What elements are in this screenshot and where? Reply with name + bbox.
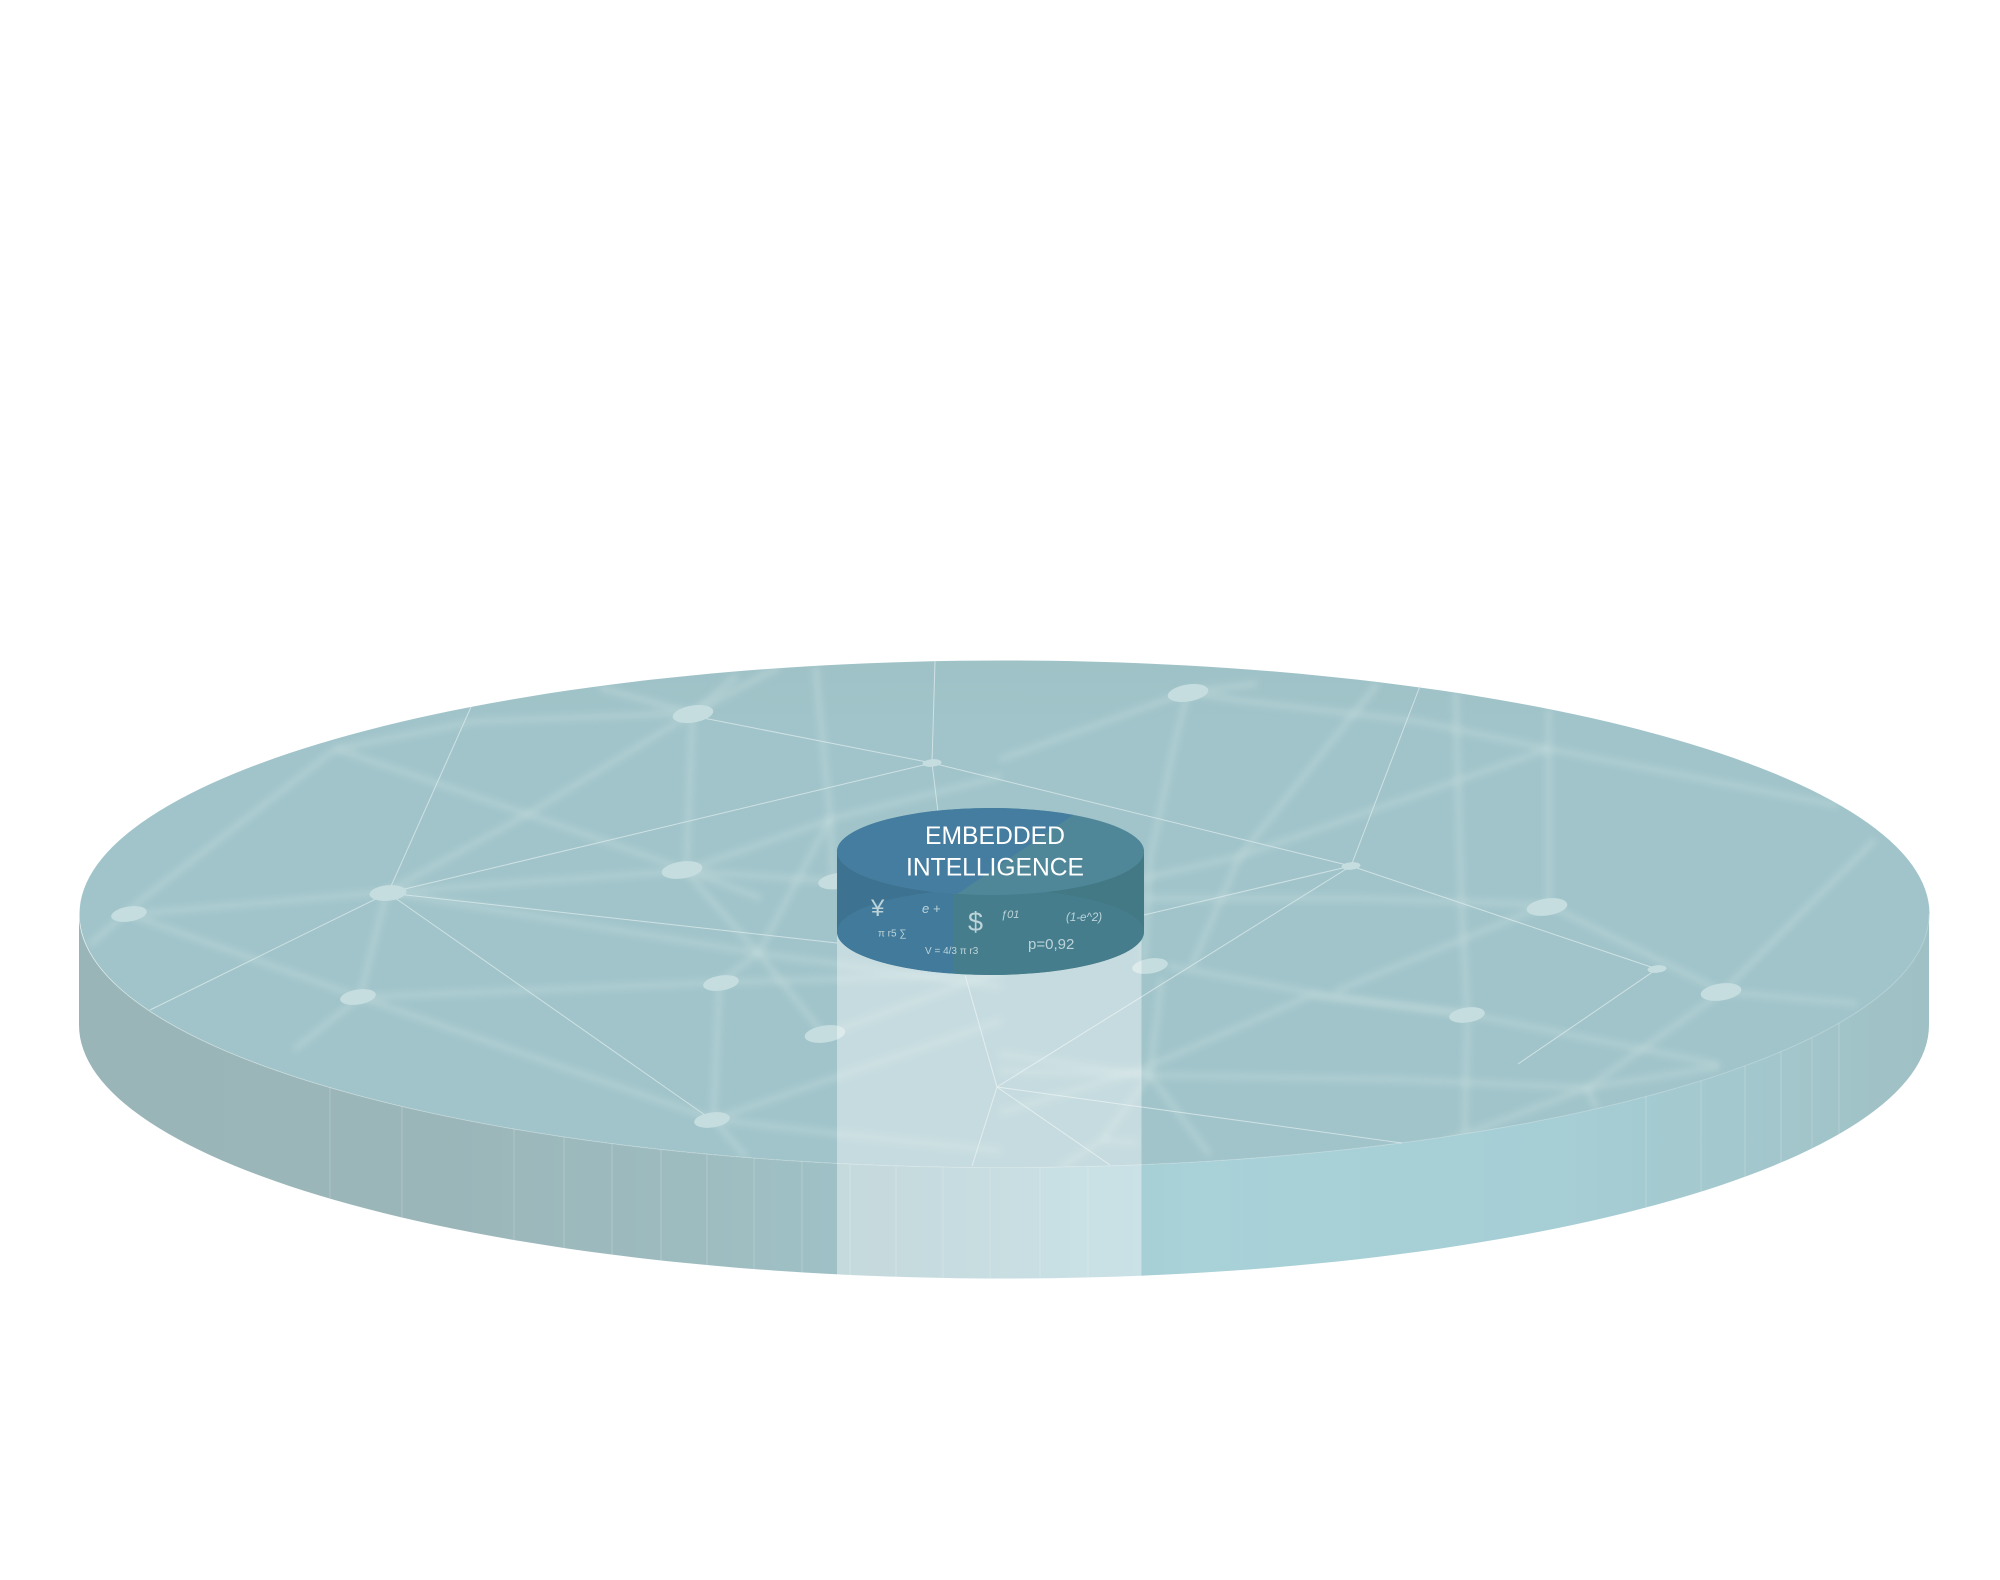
infographic: embedded intelligence disk: [79, 660, 1930, 1278]
cylinder heading: EMBEDDED: [925, 822, 1065, 850]
disk side wall: [79, 914, 1929, 1278]
formula symbols: ¥: [870, 895, 885, 922]
formula symbols: (1-e^2): [1066, 912, 1102, 924]
thin network connections: [150, 661, 1657, 1166]
cylinder body: [830, 840, 1148, 980]
formula symbols: p=0,92: [1028, 936, 1074, 953]
formula symbols: π r5 ∑: [878, 928, 906, 940]
formula symbols: ƒ01: [1001, 909, 1019, 921]
cylinder heading: INTELLIGENCE: [906, 854, 1084, 882]
cylinder top face: [837, 808, 1144, 895]
network nodes: [110, 681, 1742, 1130]
disk top surface: [80, 660, 1930, 1168]
formula symbols: $: [968, 907, 983, 937]
disk rim highlight: [79, 914, 1929, 1168]
formula symbols: V = 4/3 π r3: [925, 946, 979, 957]
formula symbols: [870, 895, 1102, 957]
translucent light column: [837, 900, 1142, 1280]
formula symbols: e +: [922, 901, 941, 916]
cylinder heading: [906, 822, 1084, 882]
central cylinder: embedded intelligence: [837, 808, 1144, 975]
blurred background network: [90, 667, 1875, 1168]
